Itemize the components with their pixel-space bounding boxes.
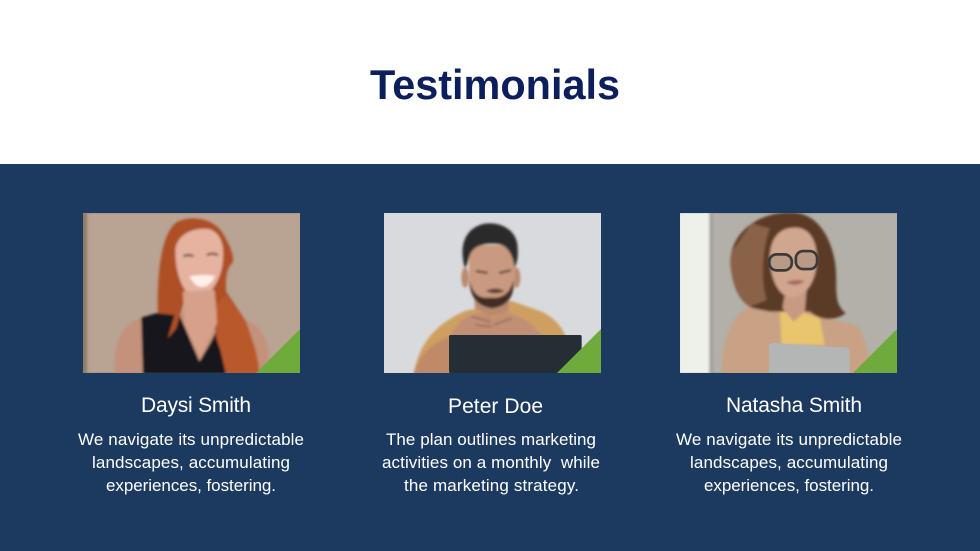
testimonial text — [78, 430, 304, 495]
name: Peter Doe: Peter Doe — [448, 395, 543, 418]
testimonial text: the marketing strategy. — [404, 476, 579, 495]
icon: green corner triangle — [256, 329, 300, 373]
testimonial text: We navigate its unpredictable — [676, 430, 902, 449]
testimonial text: activities on a monthly while — [382, 453, 600, 472]
icon: green corner triangle — [853, 329, 897, 373]
panel: dark blue testimonials band — [0, 164, 980, 551]
testimonial text — [382, 430, 600, 495]
testimonial text: experiences, fostering. — [704, 476, 874, 495]
icon: laptop — [769, 343, 850, 373]
photo: Natasha Smith — [680, 213, 897, 373]
testimonial text: landscapes, accumulating — [92, 453, 290, 472]
panel: Natasha Smith testimonial — [676, 213, 902, 495]
icon: laptop — [449, 335, 582, 373]
testimonial text: experiences, fostering. — [106, 476, 276, 495]
photo: Daysi Smith — [83, 213, 300, 373]
panel: Peter Doe testimonial — [382, 213, 601, 495]
photo: Peter Doe — [384, 213, 601, 373]
testimonial text: We navigate its unpredictable — [78, 430, 304, 449]
testimonial text: landscapes, accumulating — [690, 453, 888, 472]
title: Testimonials — [370, 61, 620, 108]
name: Daysi Smith: Daysi Smith — [141, 394, 251, 417]
icon: green corner triangle — [557, 329, 601, 373]
panel: Daysi Smith testimonial — [78, 213, 304, 495]
icon: glasses — [769, 251, 817, 270]
testimonial text — [676, 430, 902, 495]
name: Natasha Smith: Natasha Smith — [726, 394, 862, 417]
testimonial text: The plan outlines marketing — [386, 430, 596, 449]
